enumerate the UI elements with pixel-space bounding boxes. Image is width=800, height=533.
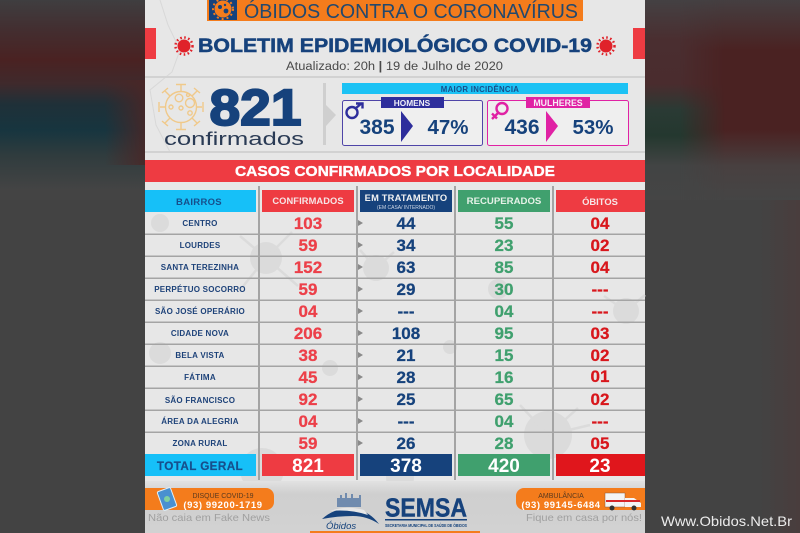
table header row: ÓBITOS — [582, 196, 618, 207]
row: Perpétuo Socorro: 59 — [299, 280, 317, 299]
arrow — [401, 111, 413, 142]
row: Perpétuo Socorro: PERPÉTUO SOCORRO — [154, 285, 246, 294]
row: Cidade Nova: 03 — [591, 324, 609, 343]
row: Área da Alegria: --- — [398, 412, 414, 431]
row: Zona Rural — [172, 434, 609, 453]
table — [145, 186, 645, 480]
row: Lourdes: 34 — [397, 236, 416, 255]
row: Cidade Nova: CIDADE NOVA — [171, 329, 229, 338]
logo: SEMSA: SECRETARIA MUNICIPAL DE SAÚDE DE ÓBIDOS — [385, 521, 467, 528]
total row: 821 — [292, 456, 324, 477]
decorative virus watermarks — [149, 214, 645, 492]
footer — [145, 481, 645, 533]
section heading: CASOS CONFIRMADOS POR LOCALIDADE — [235, 164, 555, 180]
row: São José Operário: --- — [398, 302, 414, 321]
confirmed label: confirmados — [164, 128, 304, 149]
logo: SEMSA: SEMSA — [385, 494, 467, 522]
total row: 23 — [589, 456, 611, 477]
confirmed total — [159, 79, 304, 149]
map outline watermark — [150, 0, 180, 152]
row: Área da Alegria: 04 — [299, 412, 318, 431]
top banner — [207, 0, 583, 23]
row: Área da Alegria: --- — [592, 412, 608, 431]
row: Fátima: 16 — [495, 368, 513, 387]
total row: 420 — [488, 456, 520, 477]
row: Área da Alegria: 04 — [495, 412, 514, 431]
row: São Francisco — [165, 390, 609, 409]
row: Zona Rural: 26 — [397, 434, 415, 453]
hotline left: DISQUE COVID-19 — [192, 493, 254, 500]
row: São Francisco: 02 — [591, 390, 609, 409]
icon: virus left — [176, 38, 192, 54]
row: Centro: 103 — [294, 214, 322, 233]
incidence header — [342, 83, 628, 94]
blurred photo background — [0, 6, 800, 174]
row: Bela Vista: 02 — [591, 346, 609, 365]
hotline left — [145, 487, 274, 524]
row: Lourdes — [180, 236, 609, 255]
gender incidence panel — [342, 83, 628, 146]
row: Centro: 44 — [397, 214, 416, 233]
row: Perpétuo Socorro: --- — [592, 280, 608, 299]
row: Santa Terezinha: 85 — [495, 258, 513, 277]
row: Santa Terezinha: SANTA TEREZINHA — [161, 263, 239, 272]
total row — [145, 454, 645, 477]
men card: HOMENS — [394, 98, 431, 108]
row: Centro: CENTRO — [182, 219, 218, 228]
row: Fátima: 01 — [591, 367, 609, 386]
table header row: (EM CASA/ INTERNADO) — [377, 205, 435, 211]
women card: MULHERES — [533, 98, 583, 108]
row: Perpétuo Socorro: 29 — [397, 280, 415, 299]
hotline left: Não caia em Fake News — [148, 512, 270, 524]
row: Centro: 04 — [591, 214, 610, 233]
row: Zona Rural: 28 — [495, 434, 513, 453]
row: Cidade Nova: 95 — [495, 324, 513, 343]
row: Santa Terezinha — [161, 258, 610, 277]
arrow divider — [323, 83, 336, 145]
total row: 378 — [390, 456, 422, 477]
row: São José Operário: SÃO JOSÉ OPERÁRIO — [155, 307, 245, 316]
grid lines — [145, 186, 645, 480]
row: Lourdes: 23 — [495, 236, 513, 255]
row: Santa Terezinha: 152 — [294, 258, 322, 277]
row: Cidade Nova: 206 — [294, 324, 322, 343]
women card: 53% — [572, 116, 614, 139]
icon: ambulance — [605, 493, 641, 510]
icon: female symbol — [492, 103, 508, 119]
update date: Atualizado: 20h | 19 de Julho de 2020 — [286, 61, 503, 73]
hotline right: (93) 99145-6484 — [521, 500, 601, 511]
hotline right — [516, 488, 645, 524]
row: Bela Vista: 15 — [495, 346, 513, 365]
women card — [488, 97, 628, 146]
men card: 385 — [359, 116, 395, 139]
row: São José Operário: --- — [592, 302, 608, 321]
icon: virus on blue square — [209, 0, 237, 20]
row: São Francisco: 92 — [299, 390, 317, 409]
row: Bela Vista: 21 — [397, 346, 415, 365]
banner heading: ÓBIDOS CONTRA O CORONAVÍRUS — [244, 0, 578, 23]
icon: male symbol — [346, 103, 362, 118]
hotline right: Fique em casa por nós! — [526, 512, 642, 524]
row: Santa Terezinha: 04 — [591, 258, 610, 277]
row: Lourdes: LOURDES — [180, 241, 221, 250]
main title: BOLETIM EPIDEMIOLÓGICO COVID-19 — [198, 33, 592, 57]
table header row — [145, 190, 645, 212]
row: Fátima — [184, 367, 609, 387]
row: Santa Terezinha: 63 — [397, 258, 415, 277]
table header row: CONFIRMADOS — [272, 196, 344, 206]
logo: Óbidos: Óbidos — [326, 521, 356, 532]
title block — [145, 28, 645, 73]
women card: 436 — [504, 116, 540, 139]
hotline left: (93) 99200-1719 — [183, 500, 263, 511]
row: Área da Alegria: ÁREA DA ALEGRIA — [161, 417, 239, 426]
row: São Francisco: 25 — [397, 390, 415, 409]
row: Fátima: 45 — [299, 368, 317, 387]
table header row: RECUPERADOS — [467, 196, 542, 207]
row: São José Operário: 04 — [495, 302, 514, 321]
row: Fátima: 28 — [397, 368, 415, 387]
row: Lourdes: 02 — [591, 236, 609, 255]
table header row: EM TRATAMENTO — [365, 193, 447, 203]
row: Bela Vista: 38 — [299, 346, 317, 365]
row: Centro — [182, 214, 610, 233]
men card: 47% — [427, 116, 469, 139]
row: São José Operário: 04 — [299, 302, 318, 321]
logo: Óbidos — [322, 493, 379, 532]
incidence header: MAIOR INCIDÊNCIA — [441, 85, 519, 94]
icon: virus right — [598, 38, 614, 54]
table header row: BAIRROS — [176, 197, 222, 208]
section heading — [145, 160, 645, 182]
row: Centro: 55 — [495, 214, 513, 233]
hotline right: AMBULÂNCIA — [538, 491, 584, 500]
row: Área da Alegria — [161, 412, 608, 431]
arrow — [546, 111, 558, 142]
row: Zona Rural: 59 — [299, 434, 317, 453]
big number: 821 — [210, 79, 302, 136]
row: Fátima: FÁTIMA — [184, 373, 216, 382]
row: Zona Rural: 05 — [591, 434, 609, 453]
icon: phone — [157, 487, 177, 511]
row: Bela Vista: BELA VISTA — [175, 351, 225, 360]
watermark: Www.Obidos.Net.Br — [661, 513, 792, 529]
row: Bela Vista — [175, 346, 609, 365]
row: São Francisco: SÃO FRANCISCO — [165, 396, 235, 405]
row: Perpétuo Socorro: 30 — [495, 280, 513, 299]
row: Cidade Nova: 108 — [392, 324, 420, 343]
row: Cidade Nova — [171, 324, 609, 343]
icon: virus outline — [159, 84, 203, 130]
men card — [342, 97, 482, 146]
row: Zona Rural: ZONA RURAL — [172, 439, 228, 448]
total row: TOTAL GERAL — [157, 460, 243, 473]
row: São José Operário — [155, 302, 608, 321]
row: São Francisco: 65 — [495, 390, 513, 409]
row: Lourdes: 59 — [299, 236, 317, 255]
row: Perpétuo Socorro — [154, 280, 608, 299]
